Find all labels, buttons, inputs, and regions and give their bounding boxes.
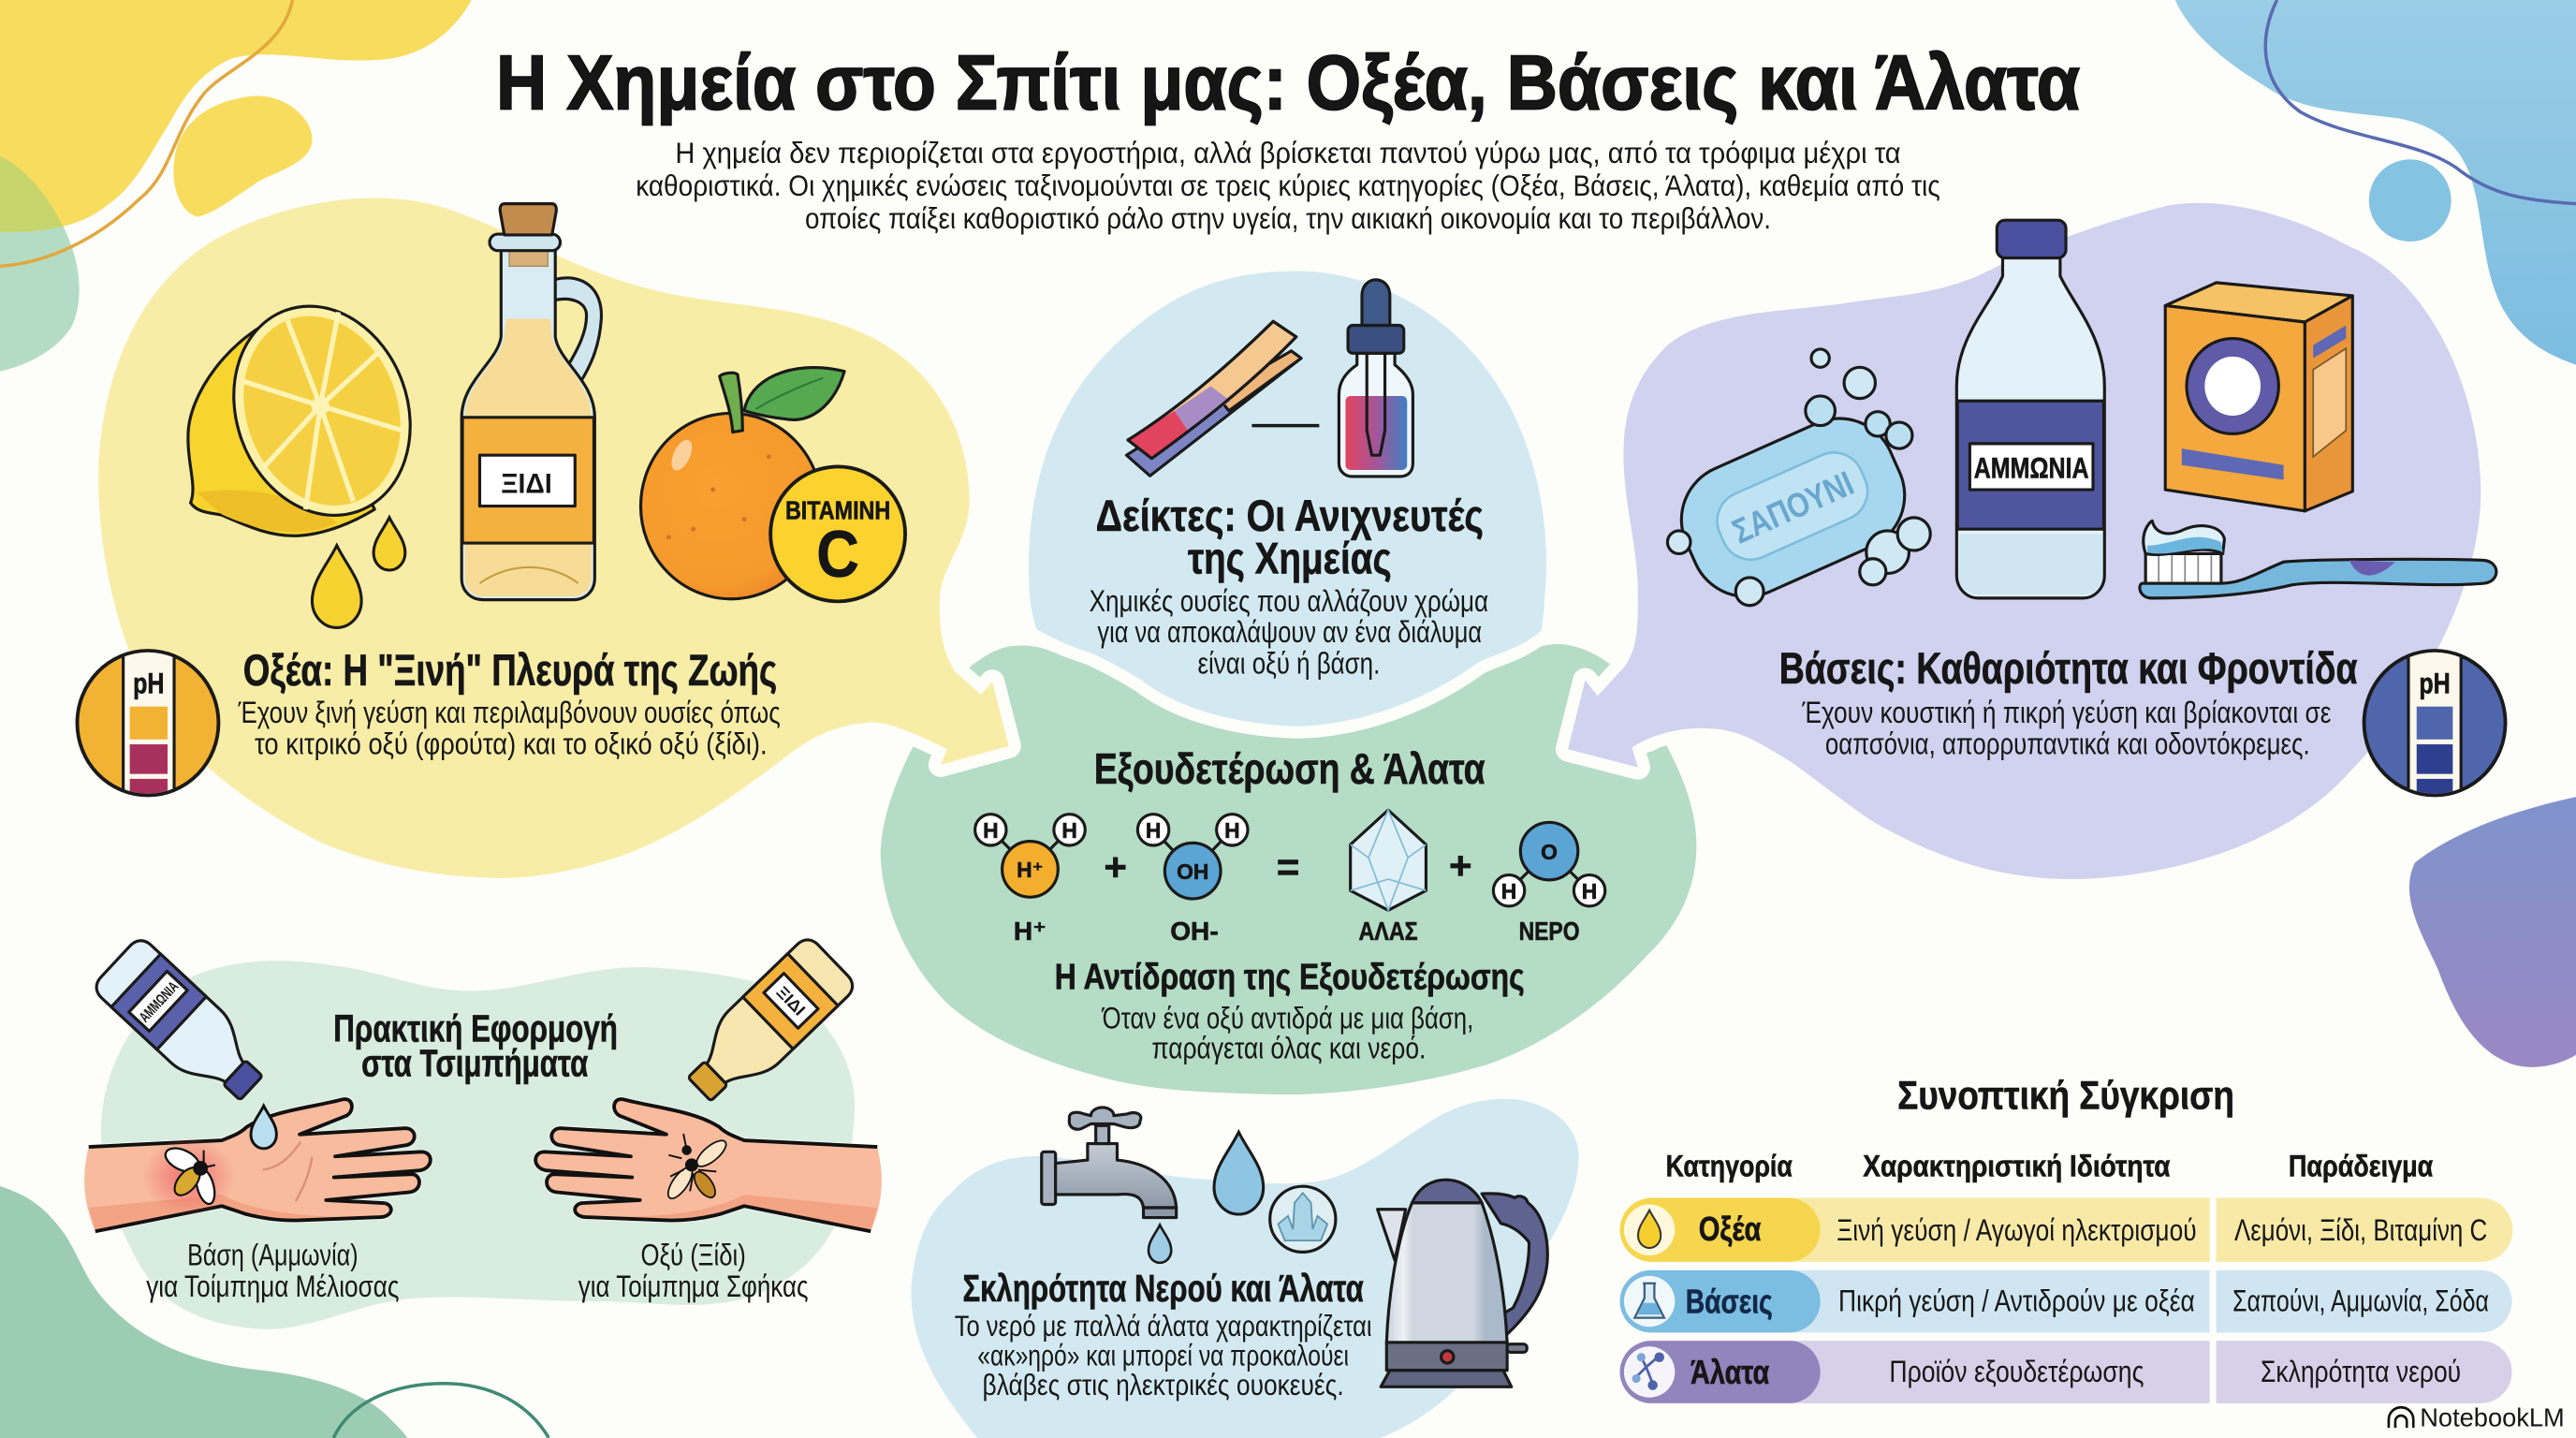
title: Η Χημεία στο Σπίτι μας: Οξέα, Βάσεις και Άλατα: [496, 40, 2080, 126]
panel: neutralization: [881, 644, 1696, 1094]
icon: ammonia bottle: ΑΜΜΩΝΙΑ: [1974, 451, 2089, 485]
molecule labels: [1014, 917, 1580, 946]
caption: acid for wasp sting: Οξύ (Ξίδι): [640, 1238, 746, 1271]
molecule: water: O: [1541, 840, 1558, 864]
icon: vinegar bottle: ΞΙΔΙ: [501, 469, 552, 500]
caption: acid for wasp sting: για Τοίμπημα Σφήκας: [578, 1269, 809, 1303]
text: reaction: [1101, 1002, 1473, 1064]
table row: bases: Σαπούνι, Αμμωνία, Σόδα: [2232, 1284, 2489, 1318]
icon: base pH badge: [2364, 649, 2506, 800]
subheading: reaction: Η Αντίδραση της Εξουδετέρωσης: [1055, 958, 1525, 998]
text: indicators: είναι οξύ ή βάση.: [1197, 647, 1380, 681]
background blob: blue oval: [2369, 159, 2452, 242]
molecule: water: H: [1501, 879, 1516, 903]
icon: baking soda box: [2165, 283, 2352, 511]
icon: kettle: [1378, 1180, 1547, 1387]
text: indicators: για να αποκαλάψουν αν ένα διάλυμα: [1097, 615, 1482, 649]
heading: neutralization: Εξουδετέρωση & Άλατα: [1094, 744, 1486, 793]
table row: acids: Οξέα: [1699, 1210, 1761, 1248]
icon: vinegar bottle: [461, 204, 601, 600]
text: acids: Έχουν ξινή γεύση και περιλαμβόνουν ουσίες όπως: [238, 696, 781, 729]
text: water hardness: Το νερό με παλλά άλατα χαρακτηρίζεται: [955, 1309, 1372, 1343]
text: water hardness: βλάβες στις ηλεκτρικές ουοκευές.: [983, 1368, 1344, 1401]
heading: indicators: Δείκτες: Οι Ανιχνευτές: [1096, 492, 1484, 541]
molecule: OH-: OH: [1177, 859, 1208, 884]
heading: acids: Οξέα: Η "Ξινή" Πλευρά της Ζωής: [243, 646, 777, 696]
text: water hardness: [955, 1309, 1372, 1401]
heading: practical application: [333, 1007, 618, 1085]
table row: acids: [1620, 1197, 2512, 1262]
molecule labels: OH-: [1170, 917, 1219, 946]
heading: water hardness: Σκληρότητα Νερού και Άλατα: [962, 1267, 1364, 1310]
icon: left hand with bee sting: [84, 1099, 431, 1231]
molecule: water: H: [1582, 879, 1597, 903]
molecule: H+: H: [983, 818, 999, 843]
plus sign: +: [1104, 845, 1127, 889]
background curve: orange line: [0, 0, 292, 266]
molecule: water: [1493, 822, 1605, 906]
panel: practical application: [84, 934, 882, 1329]
caption: base for bee sting: Βάση (Αμμωνία): [187, 1238, 359, 1271]
text: bases: Έχουν κουστική ή πικρή γεύση και βρίακονται σε: [1802, 696, 2331, 729]
table row: bases: Βάσεις: [1686, 1282, 1773, 1320]
icon: ammonia droplet: [251, 1106, 276, 1149]
text: acids: το κιτρικό οξύ (φρούτα) και το οξικό οξύ (ξίδι).: [255, 727, 768, 761]
heading: table: Συνοπτική Σύγκριση: [1897, 1074, 2234, 1119]
intro text: [636, 136, 1940, 235]
molecule labels: ΝΕΡΟ: [1519, 917, 1580, 946]
icon: base pH badge: pH: [2419, 667, 2451, 700]
icon: vitamin C badge: BITAMINH: [785, 496, 890, 525]
text: indicators: Χημικές ουσίες που αλλάζουν χρώμα: [1090, 584, 1488, 618]
icon: toothbrush: [2140, 521, 2496, 598]
heading: indicators: της Χημείας: [1188, 535, 1392, 584]
icon: lemon drop large: [312, 546, 361, 627]
text: water hardness: «ακ»ηρό» και μπορεί να προκαλούει: [977, 1338, 1349, 1372]
panel: water hardness: [912, 1099, 1579, 1438]
panel: acids: [77, 198, 1009, 878]
molecule labels: ΑΛΑΣ: [1358, 917, 1418, 946]
icon: acid pH badge: pH: [133, 667, 165, 700]
table row: acids: Ξινή γεύση / Αγωγοί ηλεκτρισμού: [1837, 1213, 2197, 1247]
icon: soap: [1663, 349, 1930, 614]
equals sign: =: [1277, 845, 1299, 889]
icon: right hand with wasp sting: [535, 1099, 882, 1231]
molecule: OH-: [1137, 814, 1248, 899]
icon: vitamin C badge: [770, 466, 905, 601]
heading: indicators: [1096, 492, 1484, 584]
intro text: καθοριστικά. Οι χημικές ενώσεις ταξινομούνται σε τρεις κύριες κατηγορίες (Οξέα, Βάσεις, Άλατα), καθεμία από τις: [636, 169, 1940, 202]
logo: NotebookLM: NotebookLM: [2420, 1402, 2565, 1431]
text: indicators: [1090, 584, 1488, 681]
icon: vinegar bottle pouring: [674, 934, 858, 1115]
molecule: H+: H: [1061, 818, 1077, 843]
table row: acids: Λεμόνι, Ξίδι, Βιταμίνη C: [2234, 1213, 2487, 1247]
background blob: small yellow: [173, 95, 312, 217]
background curve: bottom-left arc: [333, 1384, 549, 1438]
icon: soap: ΣΑΠΟΥΝΙ: [1727, 463, 1859, 551]
heading: practical application: Πρακτική Εφορμογή: [333, 1007, 618, 1050]
background curve: indigo line: [2265, 0, 2576, 204]
icon: tap droplet: [1149, 1225, 1171, 1263]
text: acids: [238, 696, 781, 761]
plus sign: +: [1449, 844, 1472, 888]
icon: water tap: [1042, 1108, 1177, 1218]
icon: lemon drop small: [373, 518, 405, 570]
panel: bases: [1568, 203, 2506, 879]
table row: salts: [1620, 1341, 2512, 1403]
molecule: OH-: H: [1224, 818, 1240, 843]
table row: salts: Σκληρότητα νερού: [2261, 1355, 2461, 1388]
table header row: [1666, 1150, 2433, 1183]
icon: ammonia bottle pouring: [91, 935, 276, 1114]
icon: lemon: [188, 281, 439, 540]
icon: vitamin C badge: C: [816, 517, 859, 591]
background blob: top-right blue: [2175, 0, 2576, 365]
table row: salts: Άλατα: [1690, 1353, 1769, 1391]
icon: ammonia bottle: [1956, 220, 2104, 598]
background blob: bottom-left green: [0, 1186, 407, 1438]
table header row: Κατηγορία: [1666, 1150, 1793, 1183]
intro text: οποίες παίξει καθοριστικό ράλο στην υγεία, την αικιακή οικονομία και το περιβάλλον.: [805, 201, 1771, 235]
icon: pH strips: [1126, 321, 1301, 476]
background blob: top-left green: [0, 156, 80, 372]
icon: salt crystal: [1351, 810, 1426, 910]
molecule labels: H⁺: [1014, 917, 1046, 946]
caption: base for bee sting: για Τοίμπημα Μέλιοσας: [146, 1269, 399, 1303]
icon: bee: [162, 1143, 218, 1206]
caption: base for bee sting: [146, 1238, 399, 1303]
molecule: H+: [975, 814, 1085, 897]
background blob: top-left yellow: [0, 0, 472, 232]
icon: ammonia bottle pouring: ΑΜΜΩΝΙΑ: [137, 979, 182, 1026]
intro text: Η χημεία δεν περιορίζεται στα εργοστήρια, αλλά βρίσκεται παντού γύρω μας, από τα τρόφιμα μέχρι τα: [675, 136, 1901, 169]
molecule: H+: H⁺: [1017, 858, 1044, 882]
text: reaction: Όταν ένα οξύ αντιδρά με μια βάση,: [1101, 1002, 1473, 1035]
text: bases: οαπσόνια, απορρυπαντικά και οδοντόκρεμες.: [1825, 727, 2310, 761]
table row: salts: Προϊόν εξουδετέρωσης: [1889, 1355, 2144, 1388]
text: reaction: παράγεται όλας και νερό.: [1151, 1031, 1426, 1064]
connector line: [1251, 425, 1319, 427]
icon: limescale crystal: [1270, 1186, 1336, 1252]
icon: vinegar bottle pouring: ΞΙΔΙ: [773, 983, 809, 1020]
icon: water drop with minerals: [1214, 1132, 1264, 1214]
background blob: right purple: [2409, 797, 2576, 1067]
panel: summary comparison table: [1620, 1074, 2512, 1403]
table row: bases: Πικρή γεύση / Αντιδρούν με οξέα: [1838, 1284, 2195, 1318]
background blob: yellow green overlap: [0, 156, 64, 232]
icon: acid pH badge: [77, 649, 218, 800]
table row: bases: [1620, 1270, 2512, 1332]
table header row: Χαρακτηριστική Ιδιότητα: [1863, 1150, 2171, 1183]
text: bases: [1802, 696, 2331, 761]
panel: indicators: [1029, 271, 1546, 726]
icon: orange: [640, 368, 844, 599]
heading: practical application: στα Τσιμπήματα: [361, 1042, 588, 1085]
molecule: OH-: H: [1146, 818, 1161, 843]
table header row: Παράδειγμα: [2289, 1150, 2433, 1183]
icon: dropper bottle: [1339, 280, 1412, 477]
icon: wasp: [664, 1134, 730, 1202]
caption: acid for wasp sting: [578, 1238, 809, 1303]
heading: bases: Βάσεις: Καθαριότητα και Φροντίδα: [1779, 644, 2358, 694]
